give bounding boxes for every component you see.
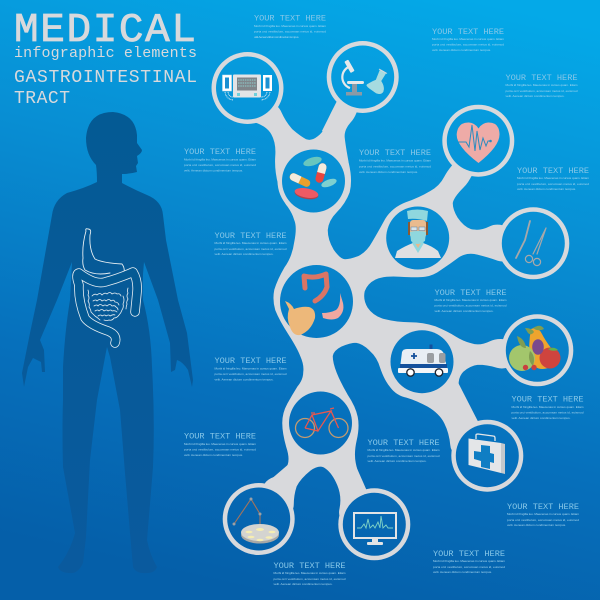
title: medical: MEDICAL bbox=[14, 8, 196, 54]
icon: microscope and flask bbox=[342, 60, 387, 96]
text block 5: velit. Aenean dictum condimentum tempus. bbox=[517, 187, 576, 191]
text block 8: porta orci vestibulum, accumsan metus id, euismod bbox=[214, 247, 287, 251]
text block 8: YOUR TEXT HERE bbox=[214, 231, 286, 241]
text block 2 bbox=[432, 27, 504, 52]
icon: heart rate monitor bbox=[354, 513, 396, 545]
text block 6: YOUR TEXT HERE bbox=[434, 288, 506, 298]
text block 3: porta orci vestibulum, accumsan metus id, euismod bbox=[506, 89, 578, 93]
text block 5: porta orci vestibulum, accumsan metus id, euismod bbox=[517, 182, 589, 186]
text block 3: YOUR TEXT HERE bbox=[506, 73, 578, 83]
text block 10 bbox=[184, 432, 256, 457]
text block 10: porta orci vestibulum, accumsan metus id, euismod bbox=[184, 448, 256, 452]
network of connected circles bbox=[242, 85, 529, 523]
title block bbox=[14, 8, 197, 109]
icon: surgeon bbox=[395, 210, 441, 258]
text block 12: Morbi id fringilla leo. Maecenas in cursus quam. Etiam bbox=[368, 448, 440, 452]
outer rings bbox=[212, 41, 573, 560]
human body silhouette bbox=[22, 112, 193, 573]
icon: pills bbox=[288, 155, 338, 201]
text block 4: Morbi id fringilla leo. Maecenas in cursus quam. Etiam bbox=[359, 158, 431, 162]
text block 2: YOUR TEXT HERE bbox=[432, 27, 504, 37]
text block 13: YOUR TEXT HERE bbox=[512, 394, 584, 404]
text block 12: velit. Aenean dictum condimentum tempus. bbox=[368, 459, 427, 463]
text block 15 bbox=[433, 549, 505, 574]
text block 11: Morbi id fringilla leo. Maecenas in cursus quam. Etiam bbox=[274, 571, 346, 575]
stomach bbox=[83, 229, 124, 274]
text block 11: YOUR TEXT HERE bbox=[274, 561, 346, 571]
icon: heart with pulse bbox=[457, 122, 500, 163]
network connector arms bbox=[268, 105, 510, 500]
text block 4: YOUR TEXT HERE bbox=[359, 148, 431, 158]
text block 14: porta orci vestibulum, accumsan metus id, euismod bbox=[507, 518, 579, 522]
text block 8: velit. Aenean dictum condimentum tempus. bbox=[214, 252, 274, 256]
text block 5 bbox=[517, 166, 589, 191]
text block 1 bbox=[254, 14, 326, 39]
text block 15: Morbi id fringilla leo. Maecenas in cursus quam. Etiam bbox=[433, 559, 505, 563]
text block 7: porta orci vestibulum, accumsan metus id, euismod bbox=[184, 163, 256, 167]
text block 13: velit. Aenean dictum condimentum tempus. bbox=[512, 416, 571, 420]
icon: bicycle bbox=[296, 408, 348, 438]
icon: first aid kit bbox=[468, 434, 505, 474]
icon: defibrillator bbox=[222, 74, 272, 100]
text block 5: Morbi id fringilla leo. Maecenas in cursus quam. Etiam bbox=[517, 176, 589, 180]
text block 11 bbox=[274, 561, 346, 586]
text block 9: porta orci vestibulum, accumsan metus id, euismod bbox=[214, 372, 287, 376]
text block 12 bbox=[368, 438, 440, 463]
text block 14: Morbi id fringilla leo. Maecenas in cursus quam. Etiam bbox=[507, 512, 579, 516]
text block 5: YOUR TEXT HERE bbox=[517, 166, 589, 176]
text block 7: YOUR TEXT HERE bbox=[184, 147, 256, 157]
text block 1: velit. Aenean dictum condimentum tempus. bbox=[254, 35, 299, 39]
digestive tract outline bbox=[77, 229, 137, 343]
text block 3: Morbi id fringilla leo. Maecenas in cursus quam. Etiam bbox=[506, 83, 578, 87]
text block 12: porta orci vestibulum, accumsan metus id, euismod bbox=[368, 454, 440, 458]
text block 15: porta orci vestibulum, accumsan metus id, euismod bbox=[433, 565, 505, 569]
text block 14: YOUR TEXT HERE bbox=[507, 502, 579, 512]
text block 13: porta orci vestibulum, accumsan metus id, euismod bbox=[512, 410, 584, 414]
text block 9 bbox=[214, 356, 287, 382]
text block 1: Morbi id fringilla leo. Maecenas in cursus quam. Etiam bbox=[254, 24, 326, 28]
large intestine lumen bbox=[77, 272, 137, 343]
text block 7: velit. Aenean dictum condimentum tempus. bbox=[184, 168, 243, 172]
inner circles bbox=[216, 46, 569, 556]
text block 9: velit. Aenean dictum condimentum tempus. bbox=[214, 378, 274, 382]
large intestine bbox=[77, 272, 137, 343]
icon: surgical instruments bbox=[516, 221, 546, 266]
text block 10: Morbi id fringilla leo. Maecenas in cursus quam. Etiam bbox=[184, 442, 256, 446]
text block 11: porta orci vestibulum, accumsan metus id, euismod bbox=[274, 577, 346, 581]
icon: ambulance bbox=[398, 344, 448, 376]
text block 6: Morbi id fringilla leo. Maecenas in cursus quam. Etiam bbox=[434, 298, 507, 302]
text block 6: porta orci vestibulum, accumsan metus id, euismod bbox=[434, 304, 507, 308]
text block 1: YOUR TEXT HERE bbox=[254, 14, 326, 24]
icon: digestive organs bbox=[285, 274, 343, 335]
text block 6: velit. Aenean dictum condimentum tempus. bbox=[434, 309, 494, 313]
text block 8: Morbi id fringilla leo. Maecenas in cursus quam. Etiam bbox=[214, 241, 287, 245]
heading: tract: TRACT bbox=[14, 89, 70, 109]
icon: surgical lamp bbox=[232, 498, 279, 544]
text block 3 bbox=[506, 73, 578, 98]
text block 7 bbox=[184, 147, 256, 172]
text block 11: velit. Aenean dictum condimentum tempus. bbox=[274, 582, 333, 586]
text block 8 bbox=[214, 231, 287, 256]
text block 1: porta orci vestibulum, accumsan metus id, euismod bbox=[254, 30, 326, 34]
icon: fruit bbox=[509, 326, 560, 371]
text block 6 bbox=[434, 288, 507, 313]
text block 7: Morbi id fringilla leo. Maecenas in cursus quam. Etiam bbox=[184, 158, 256, 162]
text block 14: velit. Aenean dictum condimentum tempus. bbox=[507, 523, 566, 527]
text block 9: Morbi id fringilla leo. Maecenas in cursus quam. Etiam bbox=[214, 366, 287, 370]
text block 12: YOUR TEXT HERE bbox=[368, 438, 440, 448]
text block 4: porta orci vestibulum, accumsan metus id, euismod bbox=[359, 164, 431, 168]
text block 3: velit. Aenean dictum condimentum tempus. bbox=[506, 94, 565, 98]
text block 13: Morbi id fringilla leo. Maecenas in cursus quam. Etiam bbox=[512, 405, 584, 409]
text block 2: Morbi id fringilla leo. Maecenas in cursus quam. Etiam bbox=[432, 37, 504, 41]
text block 10: velit. Aenean dictum condimentum tempus. bbox=[184, 453, 243, 457]
text block 10: YOUR TEXT HERE bbox=[184, 432, 256, 442]
text block 2: porta orci vestibulum, accumsan metus id, euismod bbox=[432, 42, 504, 46]
subtitle: infographic elements bbox=[14, 45, 197, 62]
text block 15: velit. Aenean dictum condimentum tempus. bbox=[433, 570, 492, 574]
text block 4: velit. Aenean dictum condimentum tempus. bbox=[359, 170, 418, 174]
text block 4 bbox=[359, 148, 431, 174]
text block 13 bbox=[512, 394, 584, 420]
text block 2: velit. Aenean dictum condimentum tempus. bbox=[432, 48, 491, 52]
small intestine bbox=[88, 288, 128, 320]
text block 15: YOUR TEXT HERE bbox=[433, 549, 505, 559]
text block 9: YOUR TEXT HERE bbox=[214, 356, 286, 366]
text block 14 bbox=[507, 502, 579, 527]
heading: gastrointestinal: GASTROINTESTINAL bbox=[14, 68, 197, 88]
